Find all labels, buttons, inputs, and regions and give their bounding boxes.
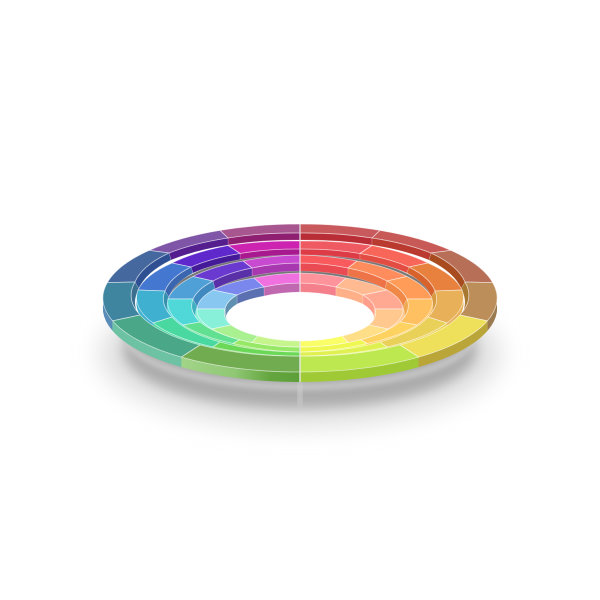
ground shadow xyxy=(100,225,500,426)
outer ring: warm xyxy=(300,224,497,372)
inner ring: warm xyxy=(300,273,403,347)
right half of colour wheel: warm colours xyxy=(300,224,497,382)
third ring: warm xyxy=(300,255,432,352)
second ring: warm xyxy=(300,241,464,356)
outer wall: cool xyxy=(103,283,300,382)
underlay closing ring seams: cool xyxy=(136,255,300,359)
left half of colour wheel: cool colours xyxy=(103,224,300,382)
underlay closing ring seams: warm xyxy=(300,255,464,359)
third ring: cool xyxy=(168,255,300,352)
centre seam xyxy=(299,224,301,382)
second ring: cool xyxy=(136,241,300,356)
outer wall: warm xyxy=(300,283,497,382)
outer ring: cool xyxy=(103,224,300,372)
inner ring: cool xyxy=(197,273,300,347)
